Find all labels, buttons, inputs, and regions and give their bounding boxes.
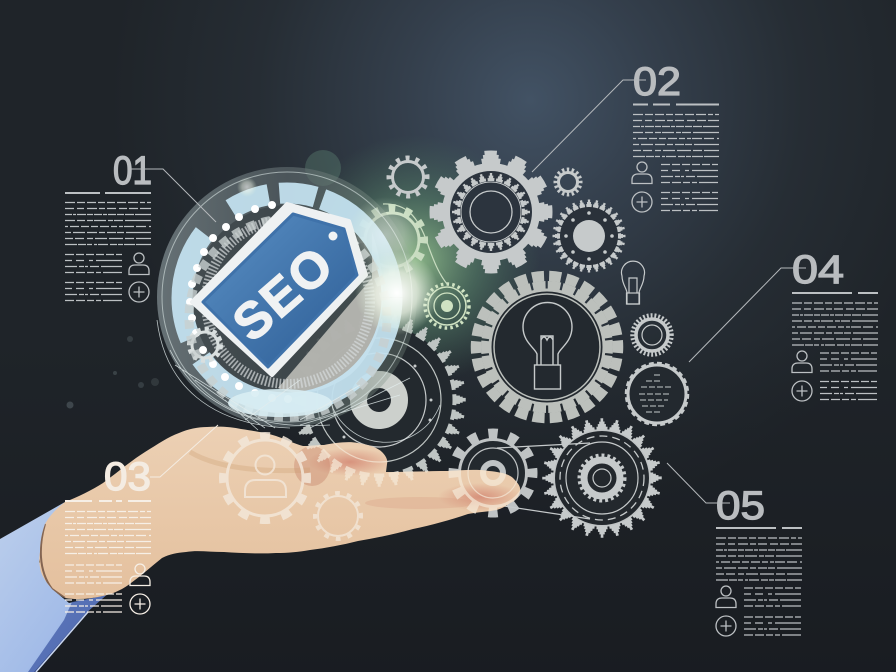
callout 02: 02 xyxy=(633,60,681,104)
gear: small on palm xyxy=(315,493,361,539)
hand xyxy=(39,426,520,599)
orb: web lines xyxy=(157,320,440,442)
orb: hatch ring xyxy=(206,220,370,384)
callout 05: 05 xyxy=(716,484,765,528)
gear: right small ring xyxy=(632,316,672,354)
gear: person on palm xyxy=(222,436,308,520)
gear: small right of large top xyxy=(556,170,580,194)
callout 01: 01 xyxy=(113,149,152,193)
gear: text disc xyxy=(626,363,688,425)
gears seen through the hand xyxy=(306,443,520,513)
gear: green-lit small xyxy=(425,284,469,328)
gear: belt pair bottom right xyxy=(454,420,660,536)
gear: large top xyxy=(432,153,550,271)
icon: person xyxy=(245,456,286,497)
gear: target large xyxy=(294,315,464,485)
orb: bottom teeth xyxy=(189,219,387,417)
callout 04: 04 xyxy=(792,248,844,292)
orb: dark interior xyxy=(193,205,383,395)
icon: small bulb xyxy=(621,261,644,304)
bokeh dots xyxy=(66,336,159,408)
callout 03 xyxy=(65,425,218,614)
sleeve xyxy=(0,502,120,672)
orb: inner gray wedge xyxy=(278,232,383,393)
gear: dotted hub xyxy=(554,201,624,271)
gear: green top behind orb xyxy=(360,204,447,284)
orb: glow xyxy=(355,251,439,335)
icon: bulb xyxy=(523,302,572,389)
orb: dots xyxy=(190,205,288,399)
orb: shell lines xyxy=(162,172,412,422)
callout 01 xyxy=(65,149,216,302)
gear: top small xyxy=(389,158,427,196)
orb: blue band xyxy=(182,193,392,403)
SEO label: SEO xyxy=(222,235,345,352)
orb with SEO tag xyxy=(157,167,440,442)
callout 02 xyxy=(532,60,719,212)
gear: big bulb xyxy=(476,276,618,418)
callout 03: 03 xyxy=(104,455,151,499)
callout 05 xyxy=(667,463,802,636)
tag xyxy=(192,204,366,375)
orb: lower-left small gear xyxy=(189,329,221,361)
orb: haze xyxy=(228,389,332,417)
callout 04 xyxy=(689,248,878,401)
